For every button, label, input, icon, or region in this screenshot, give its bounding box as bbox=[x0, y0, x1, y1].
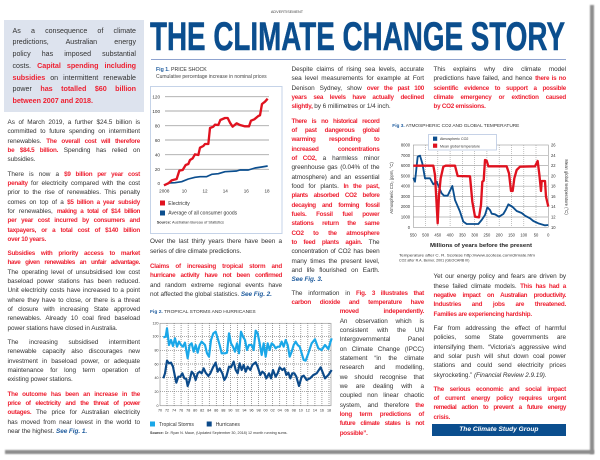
line chart: atmospheric CO2 and global temperature: 22 bbox=[551, 163, 556, 168]
line chart: tropical storms and hurricanes: Source: Dr. Ryan N. Maue, (Updated September 30, 2018) 12 month running sums. bbox=[150, 431, 288, 435]
line chart: tropical storms and hurricanes: 94 bbox=[242, 409, 247, 413]
callout text: predictions, Australian energy bbox=[12, 38, 136, 46]
text: discouraging investment: maintenance for long term operation of bbox=[8, 367, 140, 374]
line chart: price shock: 60 bbox=[155, 138, 160, 143]
line chart: price shock: 100 bbox=[152, 109, 160, 114]
line chart: tropical storms and hurricanes: 80 bbox=[154, 349, 158, 353]
line chart: atmospheric CO2 and global temperature: 450 bbox=[434, 232, 442, 238]
line chart: atmospheric CO2 and global temperature: 2000 bbox=[401, 204, 411, 209]
text: historical record: many times the present level, bbox=[292, 258, 380, 265]
line chart: atmospheric CO2 and global temperature: 4000 bbox=[401, 184, 411, 189]
line chart: atmospheric CO2 and global temperature: 12 bbox=[551, 214, 556, 220]
line chart: tropical storms and hurricanes: 92 bbox=[235, 409, 239, 413]
line chart: tropical storms and hurricanes: 98 bbox=[257, 409, 261, 413]
text: independent movement: research and modelling, bbox=[340, 364, 424, 371]
text: independent movement: on Climate Change (IPCC) bbox=[340, 346, 424, 353]
text: why models failed: This explains why dire climate model bbox=[434, 66, 566, 73]
text: sea levels: Denison Sydney, show over the past 100 bbox=[292, 85, 424, 92]
text: remedial action: remedial action to prevent a future energy bbox=[434, 404, 566, 411]
text: historical record: concentration of CO2 has been bbox=[292, 248, 380, 255]
line chart: atmospheric CO2 and global temperature: 350 bbox=[459, 232, 467, 238]
text: outcome: has moved from near lowest in the world to bbox=[8, 419, 140, 426]
heading: fig 2: Fig 2. TROPICAL STORMS AND HURRICANES bbox=[150, 310, 256, 314]
line chart: tropical storms and hurricanes: Hurricanes bbox=[216, 422, 240, 428]
line chart: tropical storms and hurricanes: 18 bbox=[327, 409, 331, 413]
line chart: atmospheric CO2 and global temperature: 150 bbox=[508, 232, 516, 238]
text: historical record: to feed plants again. The bbox=[292, 239, 380, 246]
line chart: tropical storms and hurricanes: 70 bbox=[158, 409, 162, 413]
text: discouraging investment: renewable capacity also discourages new bbox=[8, 348, 140, 355]
text: independent movement: future climate states is not bbox=[340, 420, 424, 427]
text: priority access bbox=[8, 250, 140, 332]
text: independent movement: consistent with the UN bbox=[340, 327, 424, 334]
line chart: atmospheric CO2 and global temperature: 200 bbox=[496, 232, 503, 238]
text: storm claims: hurricane activity have not been confirmed bbox=[150, 272, 282, 279]
line chart: atmospheric CO2 and global temperature: 500 bbox=[422, 232, 430, 238]
advertisement label: ADVERTISEMENT bbox=[271, 10, 303, 14]
line chart: atmospheric CO2 and global temperature: 550 bbox=[410, 232, 417, 238]
line chart: atmospheric CO2 and global temperature: 400 bbox=[447, 232, 454, 238]
page shadow bottom bbox=[5, 450, 594, 454]
text: cost penalty: taxpayers, or a total cost of $140 billion bbox=[8, 227, 140, 234]
text: priority access: renewables. Already 10 coal fired baseload bbox=[8, 315, 140, 322]
line chart: atmospheric CO2 and global temperature: 1000 bbox=[401, 214, 411, 220]
text: historical record: greenhouse gas (0.04% of the bbox=[292, 164, 380, 171]
text: state governments: stations and could send electricity prices bbox=[434, 362, 566, 369]
text: future spending: be $84.5 billion. Spending has relied on bbox=[8, 147, 140, 154]
text: historical record: plants absorbed CO2 before bbox=[292, 192, 380, 199]
line chart: tropical storms and hurricanes: 88 bbox=[221, 409, 225, 413]
line chart: atmospheric CO2 and global temperature: 10 bbox=[551, 225, 556, 230]
line chart: price shock: 10 bbox=[182, 188, 187, 194]
text: storm claims: Claims of increasing tropical storm and bbox=[150, 263, 282, 270]
text: cost penalty: penalty for electricity compared with the cost bbox=[8, 180, 140, 187]
line chart: tropical storms and hurricanes: 72 bbox=[165, 409, 169, 413]
line chart: tropical storms and hurricanes bbox=[150, 322, 333, 435]
line chart: atmospheric CO2 and global temperature: Mean global temperature (°C) bbox=[564, 159, 569, 215]
text: future spending: renewables. The overall cost will therefore bbox=[8, 138, 140, 145]
text: independent movement: An observation which is bbox=[340, 318, 424, 325]
signature banner: The Climate Study Group bbox=[459, 426, 538, 433]
text: cost penalty: comes on top of a $5 billion a year subsidy bbox=[8, 199, 140, 206]
line chart: atmospheric CO2 and global temperature: 8000 bbox=[401, 142, 411, 148]
line chart: atmospheric CO2 and global temperature: 24 bbox=[551, 153, 556, 158]
callout text: power has totalled $60 billion bbox=[12, 84, 136, 93]
line chart: tropical storms and hurricanes: 08 bbox=[292, 409, 296, 413]
text: future spending: As of March 2019, a further $24.5 billion is bbox=[8, 119, 140, 126]
line chart: atmospheric CO2 and global temperature: 250 bbox=[483, 232, 491, 238]
text: remedial action bbox=[434, 386, 566, 421]
text: remedial action: crisis. bbox=[434, 414, 450, 421]
line chart: atmospheric CO2 and global temperature: CO2 after R.A. Berner, 2001 (GEOCARB III) bbox=[399, 258, 470, 262]
line chart: atmospheric CO2 and global temperature: Mean global temperature bbox=[440, 144, 480, 148]
text: priority access: power stations have closed in Australia. bbox=[8, 325, 117, 332]
text: storm claims: not affected the global statistics. See Fig. 2. bbox=[150, 291, 272, 298]
callout text bbox=[12, 27, 136, 105]
text: historical record: food for plants. In the past, bbox=[292, 183, 380, 190]
line chart: atmospheric CO2 and global temperature: 20 bbox=[551, 173, 556, 178]
line chart: tropical storms and hurricanes: 78 bbox=[186, 409, 190, 413]
text: sea levels: years sea levels have actually declined bbox=[292, 94, 424, 101]
text: sea levels: Despite claims of rising sea levels, accurate bbox=[292, 66, 424, 73]
line chart: tropical storms and hurricanes: 10 bbox=[299, 409, 303, 413]
text: state governments: skyrocketing.” (Financial Review 2.9.19). bbox=[434, 372, 547, 379]
text: remedial action: of current energy policy requires urgent bbox=[434, 395, 566, 402]
line chart: price shock: 80 bbox=[155, 124, 160, 128]
text: state governments: and solar push will shut down coal power bbox=[434, 353, 566, 360]
text: historical record: atmosphere) and an essential bbox=[292, 174, 380, 181]
text: priority access: of closure with increasing State approved bbox=[8, 306, 140, 313]
line chart: price shock: 12 bbox=[202, 188, 208, 194]
text: historical record: See Fig. 3. bbox=[292, 276, 323, 283]
text: discouraging investment: existing power stations. bbox=[8, 376, 73, 383]
text: cost penalty: prior to the rise of renewables. This penalty bbox=[8, 189, 140, 196]
line chart: atmospheric CO2 and global temperature: 0 bbox=[408, 225, 411, 230]
callout text: costs. Capital spending including bbox=[12, 61, 136, 70]
text: remedial action: The serious economic and social impact bbox=[434, 386, 566, 393]
text: outcome: outages. The price for Australian electricity bbox=[8, 409, 140, 416]
line chart: tropical storms and hurricanes: 120 bbox=[152, 322, 158, 326]
line chart: atmospheric CO2 and global temperature: 26 bbox=[551, 142, 556, 148]
line chart: tropical storms and hurricanes: Tropical Storms bbox=[159, 422, 194, 428]
text: why models failed: predictions have failed, and hence there is no bbox=[434, 75, 566, 82]
text: cost penalty: for renewables, making a total of $14 billion bbox=[8, 208, 140, 215]
text: negative impact: Yet our energy policy and fears are driven by bbox=[434, 273, 566, 280]
text: outcome: price of electricity and the threat of power bbox=[8, 400, 140, 407]
line chart: atmospheric CO2 and global temperature: 16 bbox=[551, 194, 556, 199]
line chart: tropical storms and hurricanes: 02 bbox=[271, 409, 275, 413]
heading: fig 1: Fig 1. PRICE SHOCK bbox=[156, 66, 207, 72]
text: historical record: CO2 to the atmosphere bbox=[292, 230, 380, 237]
line chart: tropical storms and hurricanes: 96 bbox=[249, 409, 254, 413]
text: outcome: The outcome has been an increase in the bbox=[8, 391, 140, 398]
text: independent movement: The information in Fig. 3 illustrates that bbox=[292, 290, 424, 297]
line chart: atmospheric CO2 and global temperature: 7000 bbox=[401, 153, 411, 158]
line chart: atmospheric CO2 and global temperature bbox=[389, 134, 569, 262]
heading: fig 3: Fig 3. ATMOSPHERIC CO2 AND GLOBAL TEMPERATURE bbox=[392, 124, 519, 129]
text: historical record: of CO2, a harmless minor bbox=[292, 155, 380, 162]
text: cost penalty: There is now a $9 billion per year cost bbox=[8, 171, 140, 178]
text: why models failed bbox=[434, 66, 566, 110]
line chart: atmospheric CO2 and global temperature: 50 bbox=[534, 232, 539, 238]
subheading: fig 1: Cumulative percentage increase in nominal prices bbox=[156, 74, 267, 80]
line chart: atmospheric CO2 and global temperature: 6000 bbox=[401, 163, 411, 168]
line chart: atmospheric CO2 and global temperature: 300 bbox=[471, 232, 479, 238]
line chart: price shock: Electricity bbox=[168, 201, 190, 207]
text: future spending: committed to future spending on intermittent bbox=[8, 128, 140, 135]
callout text: policy has imposed substantial bbox=[12, 50, 136, 58]
text: independent movement: Intergovernmental Panel bbox=[340, 336, 424, 343]
line chart: price shock: 2008 bbox=[159, 188, 170, 194]
text: historical record: warming responding to bbox=[292, 136, 380, 143]
text: why models failed: climate emergency or extinction caused bbox=[434, 94, 566, 101]
text: historical record: decaying and forming fossil bbox=[292, 202, 380, 209]
text: historical record: fuels. Fossil fuel power bbox=[292, 211, 380, 218]
text: independent movement: moved independently. bbox=[340, 308, 424, 315]
text: storm claims bbox=[150, 263, 282, 298]
text: negative impact: Industries and jobs are threatened. bbox=[434, 301, 566, 308]
line chart: tropical storms and hurricanes: 16 bbox=[320, 409, 324, 413]
text: priority access: The operating level of unsubsidised low cost bbox=[8, 269, 140, 276]
text: priority access: baseload power stations has been reduced. bbox=[8, 278, 140, 285]
text: independent movement: coupled non linear chaotic bbox=[340, 392, 424, 399]
text: why models failed: by CO2 emissions. bbox=[434, 103, 486, 110]
text: discouraging investment bbox=[8, 339, 140, 383]
line chart: price shock bbox=[150, 86, 282, 234]
line chart: price shock: 120 bbox=[152, 94, 160, 100]
text: independent movement: we are dealing with a bbox=[340, 383, 424, 390]
text: outcome: near the highest. See Fig. 1. bbox=[8, 428, 87, 435]
callout text: As a consequence of climate bbox=[12, 27, 136, 35]
text: negative impact: these failed climate models. This has had a bbox=[434, 283, 566, 290]
line chart: atmospheric CO2 and global temperature: Atmospheric CO2 bbox=[440, 137, 468, 141]
text: future spending bbox=[8, 119, 140, 163]
text: priority access: where they have to close, or there is a threat bbox=[8, 297, 140, 304]
line chart: atmospheric CO2 and global temperature: 18 bbox=[551, 184, 556, 189]
line chart: tropical storms and hurricanes: 74 bbox=[172, 409, 176, 413]
text: negative impact: negative impact on Australian productivity. bbox=[434, 292, 566, 299]
line chart: atmospheric CO2 and global temperature: 0 bbox=[547, 232, 550, 238]
line chart: price shock: 16 bbox=[244, 188, 249, 194]
callout text: between 2007 and 2018. bbox=[12, 96, 93, 105]
line chart: tropical storms and hurricanes: 100 bbox=[152, 335, 158, 339]
text: priority access: have given renewables an unfair advantage. bbox=[8, 259, 140, 266]
title rule bbox=[151, 59, 566, 60]
line chart: price shock: 18 bbox=[264, 188, 270, 194]
line chart: tropical storms and hurricanes: 82 bbox=[200, 409, 204, 413]
text: dire predictions: series of dire climate predictions. bbox=[150, 248, 241, 255]
text: priority access: Subsidies with priority access to market bbox=[8, 250, 140, 257]
text: independent movement: we should recognise that bbox=[340, 374, 424, 381]
line chart: tropical storms and hurricanes: 20 bbox=[154, 390, 158, 394]
text: priority access: Unit electricity costs have increased to a point bbox=[8, 287, 140, 294]
text: state governments: policies, some State governments are bbox=[434, 334, 566, 341]
text: sea levels bbox=[292, 66, 424, 110]
line chart: tropical storms and hurricanes: 00 bbox=[264, 409, 268, 413]
text: historical record: and life flourished on Earth. bbox=[292, 267, 380, 274]
line chart: tropical storms and hurricanes: 14 bbox=[313, 409, 317, 413]
text: dire predictions: Over the last thirty years there have been a bbox=[150, 238, 282, 245]
text: independent movement: statement “in the climate bbox=[340, 355, 424, 362]
text: negative impact bbox=[434, 273, 566, 318]
page shadow right bbox=[590, 5, 594, 454]
line chart: tropical storms and hurricanes: 06 bbox=[285, 409, 289, 413]
text: historical record: of past dangerous global bbox=[292, 127, 380, 134]
text: negative impact: Families are experiencing hardship. bbox=[434, 311, 532, 318]
line chart: tropical storms and hurricanes: 76 bbox=[179, 409, 183, 413]
text: discouraging investment: investment in baseload power, or adequate bbox=[8, 358, 140, 365]
callout text: subsidies on intermittent renewable bbox=[12, 73, 136, 82]
text: independent movement: system, and therefore the bbox=[340, 402, 424, 409]
panel: intro callout bbox=[4, 20, 144, 112]
text: historical record: There is no historical record bbox=[292, 118, 380, 125]
text: cost penalty bbox=[8, 171, 140, 243]
line chart: tropical storms and hurricanes: 12 bbox=[306, 409, 310, 413]
text: independent movement bbox=[292, 290, 424, 437]
text: state governments: Far from addressing the effect of harmful bbox=[434, 325, 566, 332]
line chart: price shock: 0 bbox=[157, 181, 160, 186]
line chart: tropical storms and hurricanes: 90 bbox=[228, 409, 232, 413]
line chart: atmospheric CO2 and global temperature: 5000 bbox=[401, 173, 411, 178]
text: state governments bbox=[434, 325, 566, 379]
line chart: price shock: 40 bbox=[155, 152, 160, 158]
text: sea levels: sea level measurements for example at Fort bbox=[292, 75, 424, 82]
line chart: atmospheric CO2 and global temperature: Millions of years before the present bbox=[430, 243, 532, 249]
text: dire predictions bbox=[150, 238, 282, 255]
line chart: atmospheric CO2 and global temperature: Atmospheric CO₂ (ppm, °C) bbox=[389, 162, 394, 214]
text: sea levels: slightly, by 6 millimetres or 1/4 inch. bbox=[292, 103, 391, 110]
text: cost penalty: over 10 years. bbox=[8, 236, 46, 243]
line chart: atmospheric CO2 and global temperature: Temperature after C. R. Scotese http://www.scotese.com/climate.htm bbox=[399, 254, 535, 258]
text: storm claims: and random extreme regional events have bbox=[150, 282, 282, 289]
line chart: tropical storms and hurricanes: 80 bbox=[193, 409, 197, 413]
line chart: tropical storms and hurricanes: 04 bbox=[278, 409, 282, 413]
line chart: tropical storms and hurricanes: 60 bbox=[154, 362, 158, 366]
text: historical record: stations return the same bbox=[292, 220, 380, 227]
text: cost penalty: per year cost incurred by consumers and bbox=[8, 217, 140, 224]
line chart: atmospheric CO2 and global temperature: 3000 bbox=[401, 194, 411, 199]
line chart: price shock: Source: Australian Bureau of Statistics bbox=[157, 220, 224, 224]
line chart: tropical storms and hurricanes: 84 bbox=[207, 409, 211, 413]
text: independent movement: carbon dioxide and temperature have bbox=[292, 299, 424, 306]
line chart: tropical storms and hurricanes: 86 bbox=[214, 409, 218, 413]
text: independent movement: long term predictions of bbox=[340, 411, 424, 418]
line chart: price shock: Average of all consumer goods bbox=[168, 211, 238, 217]
line chart: price shock: 20 bbox=[155, 167, 160, 172]
text: future spending: subsidies. bbox=[8, 156, 35, 163]
text: historical record bbox=[292, 118, 380, 283]
line chart: atmospheric CO2 and global temperature: 100 bbox=[520, 232, 528, 238]
text: historical record: increased concentrations bbox=[292, 146, 380, 153]
line chart: price shock: 14 bbox=[223, 188, 228, 194]
text: independent movement: possible”. bbox=[340, 430, 368, 437]
line chart: tropical storms and hurricanes: 0 bbox=[156, 404, 158, 408]
text: discouraging investment: The increasing subsidised intermittent bbox=[8, 339, 140, 346]
text: why models failed: scientific evidence to support a possible bbox=[434, 85, 566, 92]
text: outcome bbox=[8, 391, 140, 435]
signature banner bbox=[432, 424, 566, 436]
line chart: atmospheric CO2 and global temperature: 14 bbox=[551, 204, 556, 209]
text: state governments: intensifying them. “Victoria’s aggressive wind bbox=[434, 344, 566, 351]
line chart: tropical storms and hurricanes: 40 bbox=[154, 376, 158, 380]
